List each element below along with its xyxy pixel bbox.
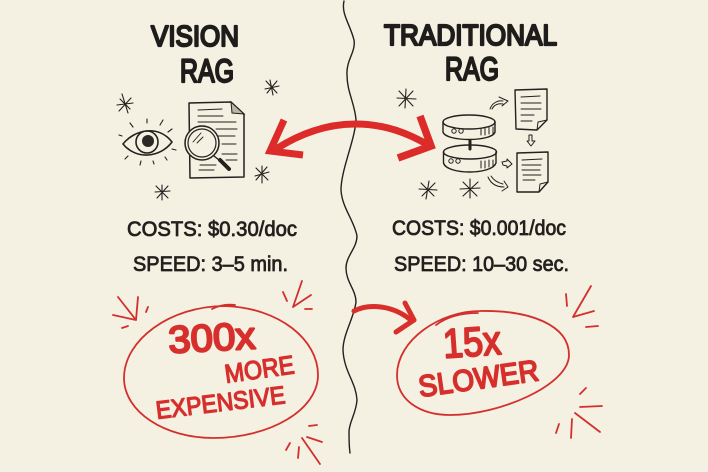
emphasis marks around 300x callout [113,281,322,464]
icon: eye [119,119,176,165]
stats: Vision RAG: SPEED: 3–5 min. [133,252,288,276]
wavy centre divider [341,1,357,453]
stats: Vision RAG: COSTS: $0.30/doc [127,217,297,241]
callout: 15x slower: SLOWER [416,354,541,404]
double-headed red arrow [270,116,431,158]
icon: database stack [443,115,496,172]
small red arrow [354,303,414,332]
stats: Traditional RAG: COSTS: $0.001/doc [392,216,566,240]
stats: Vision RAG [127,217,297,276]
stats: Traditional RAG: SPEED: 10–30 sec. [394,252,569,276]
emphasis marks around 15x callout [556,286,602,438]
callout: 15x slower: 15x [441,317,503,367]
callout: 300x more expensive: 300x [167,315,256,362]
callout: 300x more expensive: MORE [223,349,296,389]
heading: Vision RAG: RAG [180,53,234,89]
callout: 300x more expensive: EXPENSIVE [154,381,287,425]
icon: sparkles left [117,80,279,200]
icon: document stack with flow arrows [488,89,548,192]
heading: Traditional RAG: RAG [445,51,499,87]
heading: Vision RAG: VISION [151,21,239,53]
icon: document with magnifier [185,102,244,178]
heading: Vision RAG [151,21,239,89]
stats: Traditional RAG [392,216,569,276]
heading: Traditional RAG [384,20,557,87]
callout: 15x slower [397,311,569,415]
icon: sparkles right [397,89,480,199]
callout: 300x more expensive [124,305,318,438]
heading: Traditional RAG: TRADITIONAL [384,20,557,52]
